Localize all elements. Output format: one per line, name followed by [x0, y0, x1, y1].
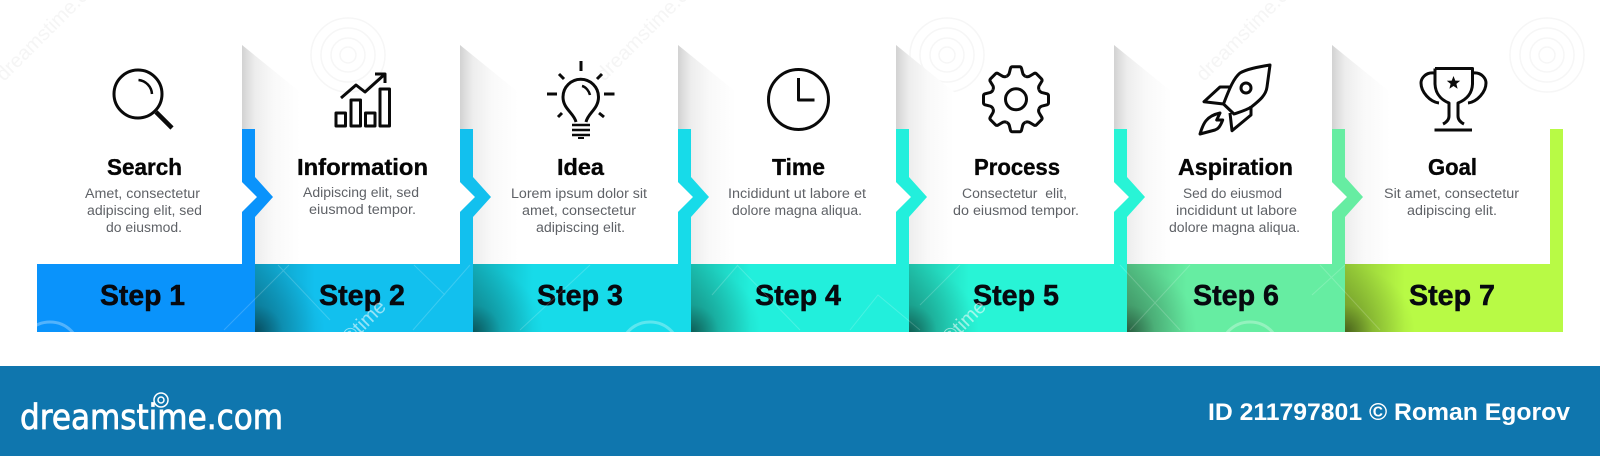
icon: clock [768, 70, 828, 130]
description: Search: adipiscing elit, sed [87, 203, 202, 218]
heading: Search: Search [107, 154, 182, 180]
label: Step 7: Step 7 [1409, 280, 1495, 312]
description: Idea: adipiscing elit. [536, 220, 625, 235]
description: Information: eiusmod tempor. [309, 202, 416, 217]
icon: rocket [1200, 65, 1270, 134]
step 7: goal [1345, 68, 1563, 332]
description: Goal: adipiscing elit. [1407, 203, 1497, 218]
step 2: information [255, 74, 491, 332]
band shadow 6 [1127, 264, 1197, 332]
step 7 band and end bar [1345, 129, 1563, 332]
heading: Time: Time [772, 154, 825, 180]
description: Idea: amet, consectetur [522, 203, 637, 218]
icon: magnifying glass [114, 70, 172, 128]
watermark spirals and text on white [0, 0, 1584, 92]
description: Time: Incididunt ut labore et [728, 186, 866, 201]
description: Search: do eiusmod. [106, 220, 182, 235]
band shadow 4 [691, 264, 761, 332]
heading: Idea: Idea [557, 154, 604, 180]
step 6 band and connector [1127, 129, 1363, 332]
heading: Information: Information [297, 154, 428, 180]
description: Search [85, 186, 202, 235]
description: Information [303, 185, 419, 217]
step 6: aspiration [1127, 65, 1363, 332]
label: Step 4: Step 4 [755, 280, 841, 312]
step 4 band and connector [691, 129, 927, 332]
heading: Process: Process [974, 154, 1060, 180]
label: Step 1: Step 1 [100, 280, 185, 312]
step 3 band and connector [473, 129, 709, 332]
band shadow 3 [473, 264, 543, 332]
description: Aspiration: incididunt ut labore [1176, 203, 1297, 218]
description: Aspiration: Sed do eiusmod [1183, 186, 1282, 201]
label: Step 3: Step 3 [537, 280, 623, 312]
step 1 band and connector [37, 129, 273, 332]
heading: Aspiration: Aspiration [1178, 154, 1293, 180]
icon: logo spiral [154, 393, 168, 407]
step 5: process [909, 67, 1145, 332]
description: Process: do eiusmod tempor. [953, 203, 1079, 218]
icon: light bulb [547, 61, 614, 138]
band shadow 7 [1345, 264, 1415, 332]
description: Idea: Lorem ipsum dolor sit [511, 186, 647, 201]
heading: Goal: Goal [1428, 154, 1477, 180]
label: Step 5: Step 5 [973, 280, 1059, 312]
connector notches kept white [242, 182, 1347, 212]
description: Process [953, 186, 1079, 218]
description: Time [728, 186, 866, 218]
watermark overlay on bands [20, 265, 1380, 382]
description: Search: Amet, consectetur [85, 186, 201, 201]
description: Aspiration [1169, 186, 1300, 235]
description: Goal: Sit amet, consectetur [1384, 186, 1520, 201]
credit: image id and author: ID 211797801 © Roman Egorov [1208, 399, 1571, 426]
fold shadows between panels [242, 45, 1390, 264]
label: Step 2: Step 2 [319, 280, 405, 312]
step 1: search [37, 70, 273, 332]
step 2 band and connector [255, 129, 491, 332]
band shadow 5 [909, 264, 979, 332]
description: Time: dolore magna aliqua. [732, 203, 862, 218]
label: Step 6: Step 6 [1193, 280, 1279, 312]
step 3: idea [473, 61, 709, 332]
footer bar [0, 366, 1600, 456]
description: Aspiration: dolore magna aliqua. [1169, 220, 1300, 235]
icon: trophy [1421, 68, 1486, 130]
watermark overlay on bands: ©time [338, 296, 391, 349]
step 4: time [691, 70, 927, 332]
description: Idea [511, 186, 647, 235]
description: Process: Consectetur elit, [962, 186, 1067, 201]
description: Information: Adipiscing elit, sed [303, 185, 419, 200]
step 5 band and connector [909, 129, 1145, 332]
icon: gear [984, 67, 1048, 132]
band shadow 2 [255, 264, 325, 332]
logo: dreamstime.com: dreamstime.com [20, 398, 283, 438]
description: Goal [1384, 186, 1520, 218]
watermark overlay on bands: ©time [938, 296, 991, 349]
icon: bar chart with arrow [336, 74, 390, 126]
